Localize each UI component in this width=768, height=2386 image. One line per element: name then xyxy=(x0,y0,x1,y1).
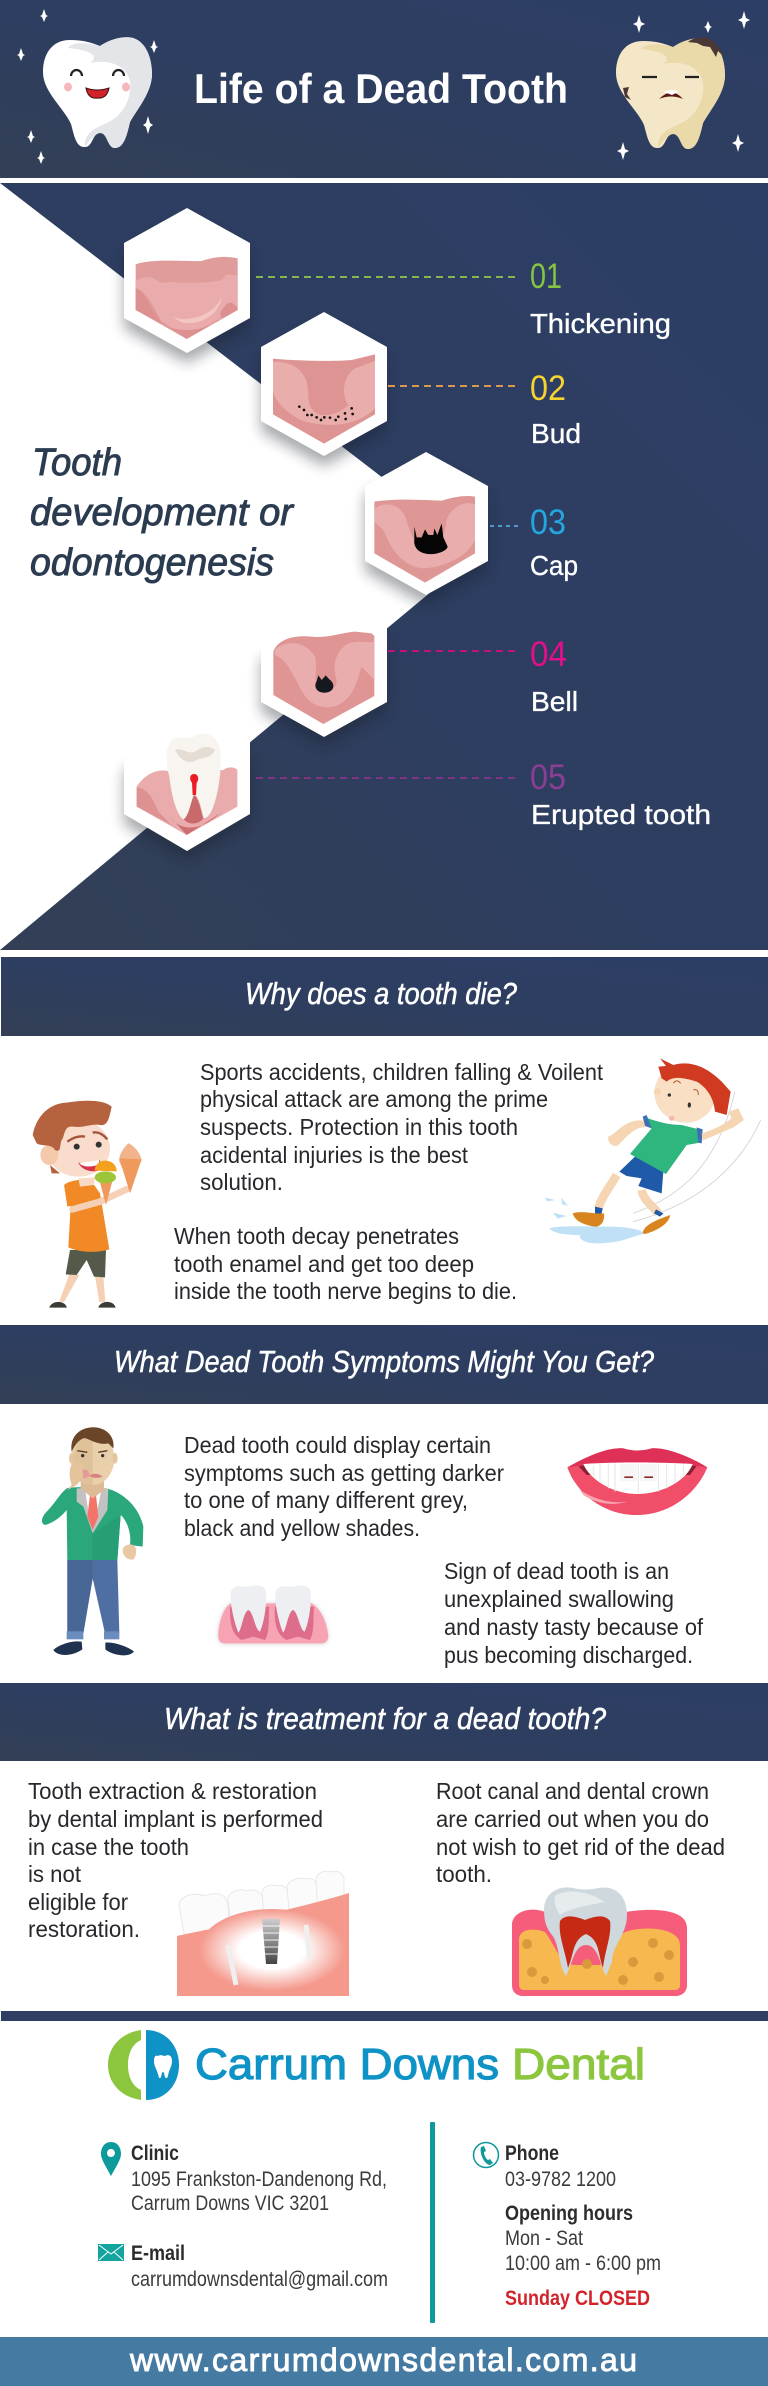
step 2: bud: 02 xyxy=(530,369,566,408)
contact: phone and hours xyxy=(474,2142,661,2310)
panel: tooth development xyxy=(0,183,768,950)
header banner xyxy=(0,0,768,178)
heading: tooth development: development or xyxy=(30,492,294,534)
step 1: thickening xyxy=(124,208,671,353)
step 5: erupted tooth: Erupted tooth xyxy=(531,799,711,830)
text: dead tooth display: black and yellow shades. xyxy=(184,1515,420,1541)
section heading: why does a tooth die xyxy=(1,957,768,1036)
illustration: boy slipping on puddle xyxy=(546,1057,761,1243)
icons: sparkles xyxy=(17,9,750,164)
step 3: cap: 03 xyxy=(530,503,566,542)
text: tooth extraction: in case the tooth xyxy=(28,1834,189,1860)
logo: Carrum Downs Dental xyxy=(108,2030,645,2100)
text: sports accidents: solution. xyxy=(200,1169,283,1195)
icon: smiling mouth with braces xyxy=(567,1448,707,1515)
text: root canal: not wish to get rid of the dead xyxy=(436,1834,725,1860)
text: tooth extraction: Tooth extraction & restoration xyxy=(28,1778,317,1804)
heading: tooth development: odontogenesis xyxy=(30,542,274,584)
footer: website xyxy=(0,2337,768,2386)
contact: clinic address xyxy=(101,2142,387,2215)
step 3: cap xyxy=(365,452,578,595)
text: sign of dead tooth: unexplained swallowing xyxy=(444,1586,674,1612)
text: sign of dead tooth: and nasty tasty because of xyxy=(444,1614,704,1640)
text: tooth extraction: restoration. xyxy=(28,1916,140,1942)
text: root canal: tooth. xyxy=(436,1861,492,1887)
contact: email: E-mail xyxy=(131,2242,185,2265)
heading: tooth development xyxy=(30,442,294,584)
contact: clinic address: Clinic xyxy=(131,2142,179,2165)
icon: map pin xyxy=(101,2142,121,2176)
step 4: bell: Bell xyxy=(531,686,578,717)
text: dead tooth display: Dead tooth could display certain xyxy=(184,1432,491,1458)
icon: phone xyxy=(474,2142,498,2168)
text: tooth extraction: is not xyxy=(28,1861,82,1887)
text: tooth extraction: eligible for xyxy=(28,1889,128,1915)
text: tooth decay: inside the tooth nerve begins to die. xyxy=(174,1278,517,1304)
contact: phone and hours: Phone xyxy=(505,2142,559,2165)
footer: website: www.carrumdownsdental.com.au xyxy=(129,2342,637,2378)
step 3: cap: Cap xyxy=(530,550,578,581)
section heading: dead tooth symptoms: What Dead Tooth Symptoms Might You Get? xyxy=(114,1344,655,1379)
text: tooth decay xyxy=(174,1223,517,1304)
illustration: boy eating ice cream xyxy=(33,1101,142,1308)
contact: phone and hours: 03-9782 1200 xyxy=(505,2168,616,2191)
contact: clinic address: 1095 Frankston-Dandenong Rd, xyxy=(131,2168,387,2191)
text: tooth extraction: by dental implant is performed xyxy=(28,1806,323,1832)
hexagon shadows xyxy=(124,218,488,861)
text: root canal xyxy=(436,1778,725,1887)
text: root canal: Root canal and dental crown xyxy=(436,1778,709,1804)
logo: Carrum Downs Dental: Dental xyxy=(512,2040,645,2089)
vertical divider xyxy=(430,2122,435,2323)
icon: envelope xyxy=(98,2244,124,2261)
panel: symptoms xyxy=(42,1427,707,1668)
text: tooth decay: When tooth decay penetrates xyxy=(174,1223,459,1249)
section heading: treatment xyxy=(0,1683,768,1761)
section heading: dead tooth symptoms xyxy=(0,1325,768,1404)
title: Life of a Dead Tooth xyxy=(194,65,568,112)
text: sign of dead tooth xyxy=(444,1558,704,1668)
step 5: erupted tooth: 05 xyxy=(530,758,566,797)
icon: happy white tooth xyxy=(43,37,152,148)
step 2: bud: Bud xyxy=(531,418,581,449)
contact: phone and hours: 10:00 am - 6:00 pm xyxy=(505,2252,661,2275)
text: sports accidents: physical attack are among the prime xyxy=(200,1086,548,1112)
contact: email xyxy=(98,2242,388,2291)
step 4: bell: 04 xyxy=(530,635,567,674)
contact: clinic address: Carrum Downs VIC 3201 xyxy=(131,2192,329,2215)
illustration: man holding cheek xyxy=(42,1427,143,1655)
contact: phone and hours: Mon - Sat xyxy=(505,2227,583,2250)
contact: phone and hours: Sunday CLOSED xyxy=(505,2287,650,2310)
text: sports accidents: Sports accidents, children falling & Voilent xyxy=(200,1059,604,1085)
step 5: erupted tooth xyxy=(124,706,711,851)
step 1: thickening: 01 xyxy=(530,257,562,296)
text: sign of dead tooth: Sign of dead tooth is an xyxy=(444,1558,669,1584)
panel: why does a tooth die xyxy=(33,1057,761,1308)
section heading: treatment: What is treatment for a dead tooth? xyxy=(164,1701,607,1736)
divider bar xyxy=(1,2011,768,2021)
icon: decayed yellow tooth xyxy=(616,38,725,149)
step 2: bud xyxy=(261,312,581,456)
illustration: root canal xyxy=(512,1887,687,1996)
text: sports accidents: acidental injuries is the best xyxy=(200,1142,469,1168)
text: dead tooth display xyxy=(184,1432,504,1541)
text: root canal: are carried out when you do xyxy=(436,1806,709,1832)
text: sports accidents xyxy=(200,1059,604,1195)
text: tooth extraction xyxy=(28,1778,323,1942)
illustration: dental implant xyxy=(177,1871,349,1996)
icon: gums with two teeth xyxy=(218,1585,328,1644)
text: dead tooth display: symptoms such as getting darker xyxy=(184,1460,504,1486)
text: dead tooth display: to one of many different grey, xyxy=(184,1487,468,1513)
contact: email: carrumdownsdental@gmail.com xyxy=(131,2268,388,2291)
section heading: why does a tooth die: Why does a tooth die? xyxy=(245,976,518,1011)
text: sports accidents: suspects. Protection in this tooth xyxy=(200,1114,518,1140)
text: tooth decay: tooth enamel and get too deep xyxy=(174,1251,474,1277)
contact: phone and hours: Opening hours xyxy=(505,2202,633,2225)
logo: Carrum Downs Dental: Carrum Downs xyxy=(195,2040,499,2089)
step 1: thickening: Thickening xyxy=(530,308,671,339)
step 4: bell xyxy=(261,592,578,737)
text: sign of dead tooth: pus becoming discharged. xyxy=(444,1642,693,1668)
heading: tooth development: Tooth xyxy=(32,442,122,484)
panel: treatment xyxy=(28,1778,725,1996)
